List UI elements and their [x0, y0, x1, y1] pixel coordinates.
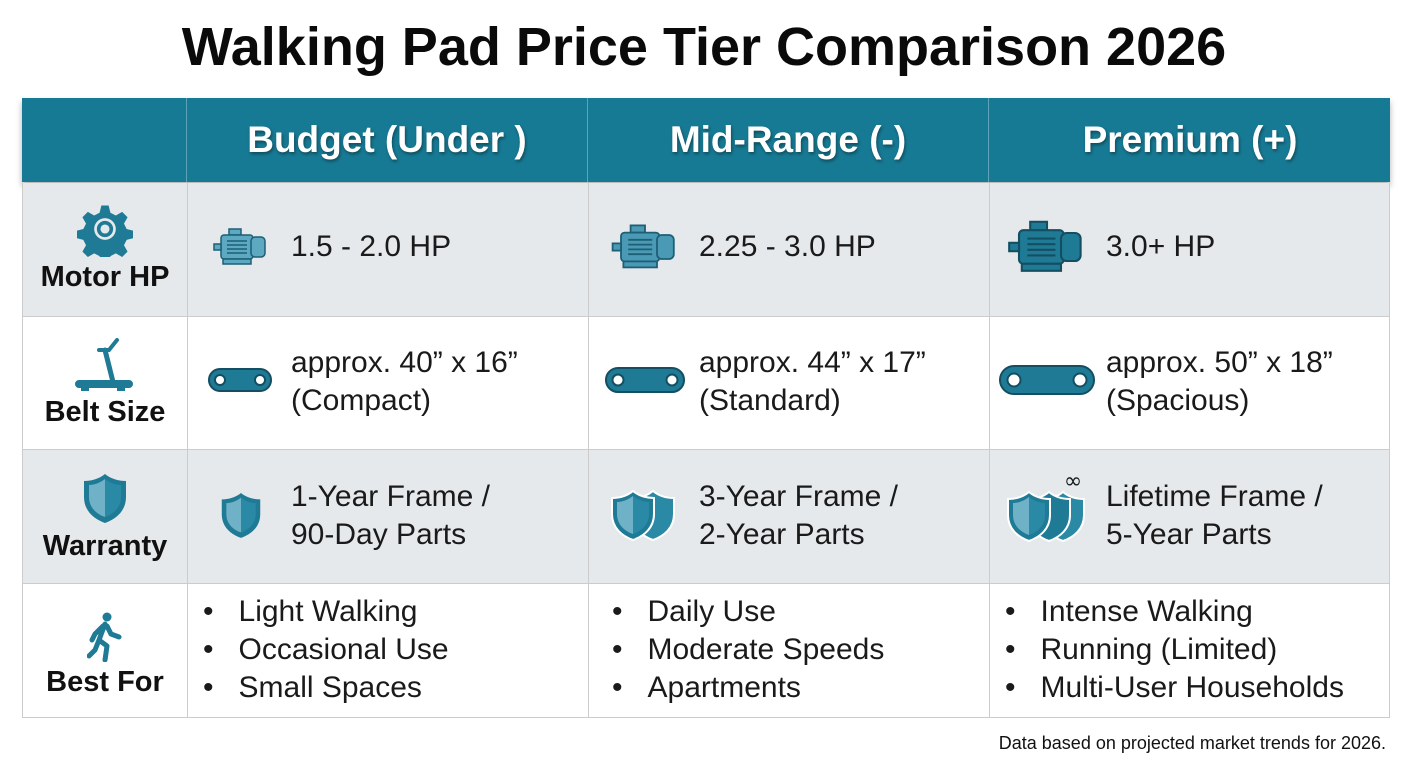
- text: premium belt: [1106, 346, 1333, 417]
- icon: walker: [87, 612, 122, 662]
- header row: [22, 98, 1390, 182]
- row: warranty: [22, 450, 1390, 584]
- list: premium: • Running (Limited): [1005, 633, 1277, 666]
- icon: three shields with infinity: ∞: [1064, 469, 1082, 494]
- list: mid: • Daily Use: [612, 595, 776, 628]
- text: budget warranty: [291, 480, 490, 551]
- list: budget: • Occasional Use: [203, 633, 449, 666]
- text: premium warranty: 5-Year Parts: [1106, 518, 1272, 551]
- footnote: Data based on projected market trends for 2026.: [999, 733, 1386, 753]
- list: mid: [612, 595, 884, 704]
- icon: gear: [77, 206, 133, 257]
- text: premium belt: approx. 50” x 18”: [1106, 346, 1333, 379]
- icon: large motor: [1008, 220, 1082, 272]
- icon: large belt: [999, 365, 1095, 395]
- text: budget belt: (Compact): [291, 384, 431, 417]
- header: budget: Budget (Under ): [247, 119, 527, 160]
- list: premium: [1005, 595, 1344, 704]
- row: motor HP: [22, 183, 1390, 317]
- list: mid: • Apartments: [612, 671, 801, 704]
- text: mid warranty: 2-Year Parts: [699, 518, 865, 551]
- text: premium warranty: Lifetime Frame /: [1106, 480, 1323, 513]
- icon: shield: [84, 474, 126, 523]
- text: mid belt: (Standard): [699, 384, 841, 417]
- list: premium: • Intense Walking: [1005, 595, 1253, 628]
- text: budget warranty: 1-Year Frame /: [291, 480, 490, 513]
- label: warranty: Warranty: [43, 530, 167, 562]
- text: budget belt: [291, 346, 518, 417]
- icon: medium motor: [612, 224, 675, 268]
- text: mid warranty: 3-Year Frame /: [699, 480, 898, 513]
- list: mid: • Moderate Speeds: [612, 633, 884, 666]
- text: premium HP: 3.0+ HP: [1106, 230, 1215, 263]
- header: premium: Premium (+): [1083, 119, 1297, 160]
- header: mid-range: [587, 98, 988, 182]
- list: budget: • Small Spaces: [203, 671, 422, 704]
- header: premium: [988, 98, 1391, 182]
- text: premium belt: (Spacious): [1106, 384, 1249, 417]
- icon: three shields with infinity: [1007, 469, 1085, 542]
- text: budget warranty: 90-Day Parts: [291, 518, 466, 551]
- icon: two shields: [611, 490, 675, 541]
- label: best for: Best For: [46, 666, 164, 698]
- header: budget: [186, 98, 587, 182]
- row: belt size: [22, 316, 1390, 450]
- text: mid warranty: [699, 480, 898, 551]
- icon: small motor: [213, 228, 266, 265]
- list: premium: • Multi-User Households: [1005, 671, 1344, 704]
- text: mid HP: 2.25 - 3.0 HP: [699, 230, 876, 263]
- list: budget: • Light Walking: [203, 595, 417, 628]
- text: mid belt: approx. 44” x 17”: [699, 346, 926, 379]
- text: budget HP: 1.5 - 2.0 HP: [291, 230, 451, 263]
- text: premium warranty: [1106, 480, 1323, 551]
- icon: medium belt: [605, 367, 685, 393]
- header: mid-range: Mid-Range (-): [670, 119, 906, 160]
- title: Walking Pad Price Tier Comparison 2026: [182, 17, 1226, 77]
- text: mid belt: [699, 346, 926, 417]
- label: belt size: Belt Size: [45, 396, 165, 428]
- label: motor HP: Motor HP: [41, 261, 169, 293]
- icon: small belt: [208, 368, 272, 392]
- row: best for: [22, 584, 1390, 718]
- icon: one shield: [222, 493, 260, 538]
- list: budget: [203, 595, 449, 704]
- text: budget belt: approx. 40” x 16”: [291, 346, 518, 379]
- icon: treadmill: [75, 338, 133, 391]
